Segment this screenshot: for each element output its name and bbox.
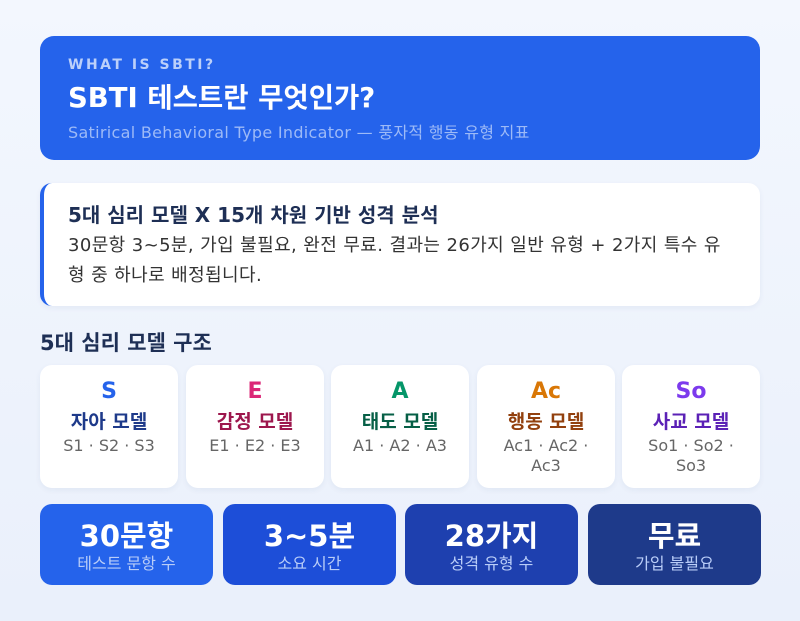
model card: Ac <box>477 365 615 488</box>
stat: time <box>223 504 396 585</box>
stat: time: 3~5분 <box>264 519 355 553</box>
model card: E <box>186 365 324 488</box>
model card: S <box>40 365 178 488</box>
model card: Ac: 행동 모델 <box>508 411 584 433</box>
model card: So <box>622 365 760 488</box>
stat: free: 무료 <box>648 519 701 553</box>
model card: S: S <box>101 379 117 404</box>
model card: Ac: Ac <box>531 379 561 404</box>
summary heading: 5대 심리 모델 X 15개 차원 기반 성격 분석 <box>68 203 438 227</box>
stat: questions: 테스트 문항 수 <box>77 554 176 573</box>
summary card <box>40 183 760 306</box>
model card: So: So <box>676 379 706 404</box>
stat: types: 28가지 <box>445 519 538 553</box>
stat: free: 가입 불필요 <box>635 554 714 573</box>
model card: A: A1 · A2 · A3 <box>353 436 447 455</box>
title: SBTI 테스트란 무엇인가? <box>68 82 375 114</box>
section heading: 5대 심리 모델 구조 <box>40 331 212 355</box>
stat: questions: 30문항 <box>80 519 173 553</box>
stat: free <box>588 504 761 585</box>
stat: questions <box>40 504 213 585</box>
header panel <box>40 36 760 160</box>
kicker: WHAT IS SBTI? <box>68 57 216 73</box>
model card: Ac: Ac1 · Ac2 · Ac3 <box>504 436 588 475</box>
model card: A: A <box>391 379 409 404</box>
model card: A: 태도 모델 <box>362 411 438 433</box>
model card: E: E1 · E2 · E3 <box>209 436 301 455</box>
model card: E: E <box>247 379 263 404</box>
model card: So: 사교 모델 <box>653 411 729 433</box>
model card: So: So1 · So2 · So3 <box>648 436 734 475</box>
summary text: 30문항 3~5분, 가입 불필요, 완전 무료. 결과는 26가지 일반 유형 + 2가지 특수 유형 중 하나로 배정됩니다. <box>68 235 721 286</box>
model card: A <box>331 365 469 488</box>
model card: S: 자아 모델 <box>71 411 147 433</box>
model card: E: 감정 모델 <box>217 411 293 433</box>
subtitle: Satirical Behavioral Type Indicator — 풍자적 행동 유형 지표 <box>68 123 530 142</box>
stat: time: 소요 시간 <box>278 554 341 573</box>
stat: types: 성격 유형 수 <box>450 554 533 573</box>
stat: types <box>405 504 578 585</box>
model card: S: S1 · S2 · S3 <box>63 436 155 455</box>
